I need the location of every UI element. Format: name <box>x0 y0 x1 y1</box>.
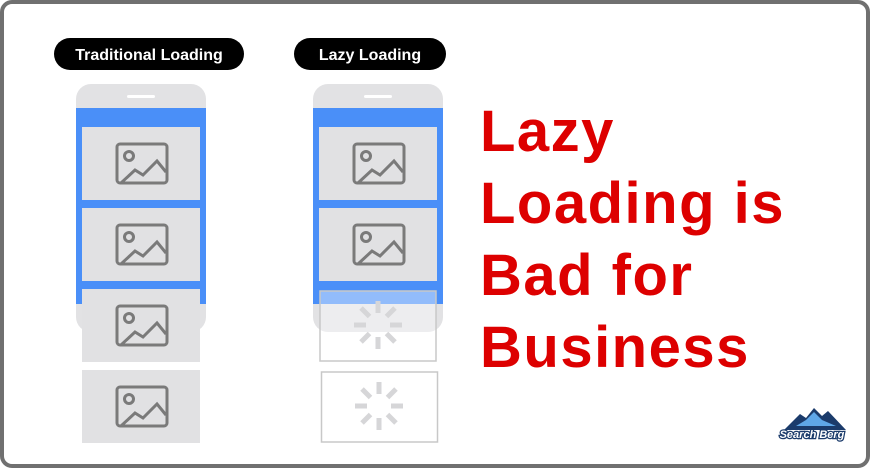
headline: Bad for <box>480 243 694 308</box>
headline: Lazy <box>480 99 615 164</box>
logo: Search Berg <box>780 408 846 441</box>
loading placeholder 2 <box>322 372 438 442</box>
headline: Loading is <box>480 171 785 236</box>
logo: Search Berg: Search Berg <box>780 429 845 441</box>
loading placeholder 1 <box>320 291 436 361</box>
image 2 <box>319 208 437 281</box>
phone: lazy loading <box>313 84 443 442</box>
headline: Business <box>480 315 750 380</box>
label: Traditional Loading: Traditional Loading <box>75 47 223 64</box>
label: Lazy Loading <box>294 38 446 70</box>
image 2 <box>82 208 200 281</box>
label: Lazy Loading: Lazy Loading <box>319 47 421 64</box>
headline <box>480 99 785 380</box>
label: Traditional Loading <box>54 38 244 70</box>
image 4 <box>82 370 200 443</box>
image 3 <box>82 289 200 362</box>
phone: traditional loading <box>76 84 206 443</box>
image 1 <box>319 127 437 200</box>
image 1 <box>82 127 200 200</box>
